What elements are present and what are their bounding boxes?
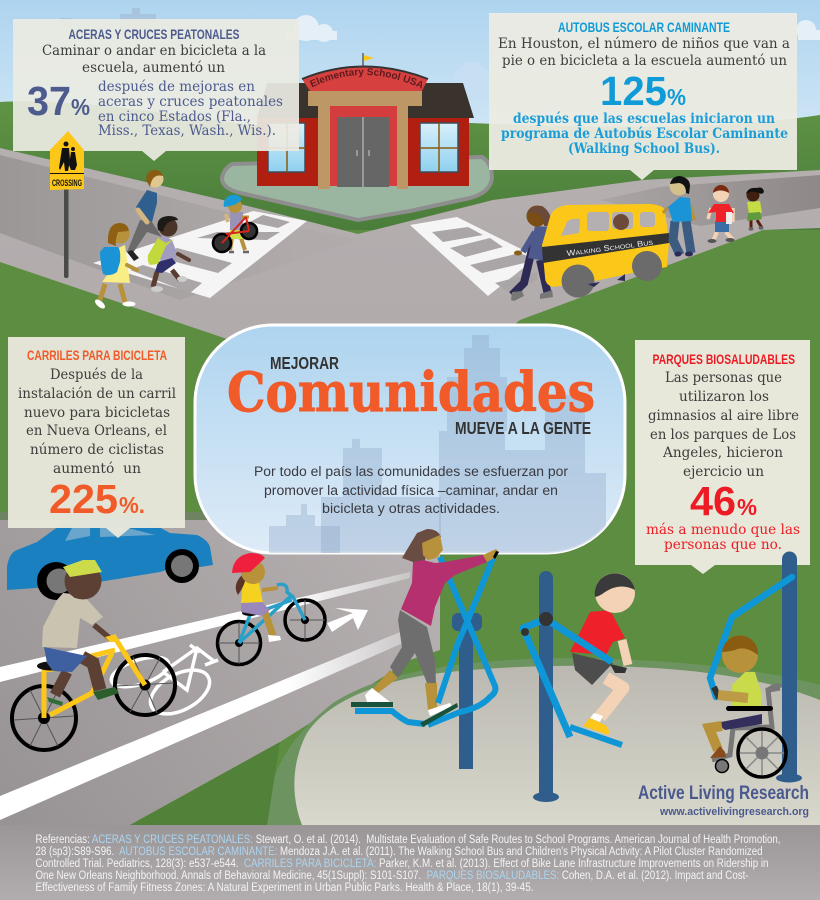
bus wheels xyxy=(562,251,662,298)
strider machine and boy xyxy=(521,571,635,802)
panel heading xyxy=(227,353,595,438)
callout: parques: ejercicio un xyxy=(683,464,764,480)
machine post xyxy=(452,613,482,769)
callout: carriles: número de ciclistas xyxy=(30,442,164,458)
panel heading: Comunidades xyxy=(227,360,595,424)
stat 125%: 125 xyxy=(600,68,667,114)
references footer xyxy=(0,825,820,900)
callout: autobus: (Walking School Bus). xyxy=(568,141,720,157)
callout: parques: Angeles, hicieron xyxy=(662,445,783,461)
rider shorts xyxy=(44,647,87,672)
callout: autobus: después que las escuelas iniciaron un xyxy=(513,111,775,127)
callout: aceras: ACERAS Y CRUCES PEATONALES xyxy=(68,26,240,42)
parked car xyxy=(7,517,213,600)
callout: carriles: instalación de un carril xyxy=(18,386,176,402)
wheels xyxy=(738,729,786,777)
callout: aceras: Caminar o andar en bicicleta a la xyxy=(42,43,266,59)
callout: autobus: pie o en bicicleta a la escuela aumentó un xyxy=(502,53,787,69)
callout: autobus: programa de Autobús Escolar Caminante xyxy=(501,126,788,142)
right crosswalk xyxy=(410,217,537,296)
callout: parques: más a menudo que las xyxy=(646,522,800,538)
rider torso xyxy=(42,593,103,648)
brick wall xyxy=(257,118,469,186)
dark grass corner xyxy=(130,742,280,825)
callout: aceras: aceras y cruces peatonales xyxy=(98,94,283,110)
callout: parques: personas que no. xyxy=(664,537,782,553)
lawn xyxy=(0,230,820,830)
callout: autobus: AUTOBUS ESCOLAR CAMINANTE xyxy=(558,19,730,35)
boy shorts xyxy=(572,653,613,685)
callout: parques xyxy=(635,340,810,574)
cyclist on yellow bike xyxy=(12,560,175,750)
logo: Active Living Research xyxy=(638,783,809,818)
bike lane symbol xyxy=(108,645,218,723)
callout: carriles: en Nueva Orleans, el xyxy=(26,423,167,439)
hand xyxy=(483,549,499,562)
panel skyline xyxy=(269,335,606,557)
callout: carriles: Después de la xyxy=(50,367,143,383)
bus name band: Walking School Bus xyxy=(566,238,654,258)
adult pedestrian xyxy=(127,170,164,261)
lower-left road xyxy=(0,520,440,825)
boy with backpack xyxy=(148,216,189,292)
crossing sign: CROSSING xyxy=(52,178,82,189)
central panel xyxy=(195,325,625,557)
callout: parques: en los parques de Los xyxy=(650,427,796,443)
callout: carriles xyxy=(8,337,185,538)
clouds and distant skyline xyxy=(60,8,820,98)
callout: aceras: después de mejoras en xyxy=(98,79,255,95)
panel text: bicicleta y otras actividades. xyxy=(322,501,500,516)
school building xyxy=(257,53,474,189)
stat 225%: %. xyxy=(119,492,145,518)
stat 46%: % xyxy=(737,494,757,520)
bike frame xyxy=(44,638,145,718)
bike lane arrow xyxy=(327,608,368,632)
shins xyxy=(372,670,437,710)
callout: parques: utilizaron los xyxy=(679,389,769,405)
callout: aceras: escuela, aumentó un xyxy=(82,60,225,76)
boy leg xyxy=(600,678,623,717)
stat 46%: 46 xyxy=(690,478,736,524)
crossing sign xyxy=(50,131,84,278)
references footer: Controlled Trial. Pediatrics, 128(3): e537-e544. CARRILES PARA BICICLETA: Parker, K.M. et al. (2013). Effect of Bike Lane Infrastructure Improvements on Ridership in xyxy=(36,858,768,870)
walking school bus xyxy=(542,204,669,298)
rider legs xyxy=(82,657,100,690)
boy head xyxy=(595,573,635,613)
wheelchair user xyxy=(709,552,802,782)
elliptical machine and woman xyxy=(351,529,499,769)
callout: aceras xyxy=(13,19,299,161)
boy shirt xyxy=(570,610,625,655)
wheels xyxy=(12,655,175,750)
panel text: Por todo el país las comunidades se esfuerzan por xyxy=(254,464,569,479)
pants xyxy=(390,610,436,683)
stat 225%: 225 xyxy=(49,476,118,522)
bus windows xyxy=(561,212,655,236)
sky background xyxy=(0,0,820,150)
stat 37%: 37 xyxy=(27,78,71,124)
references footer: Effectiveness of Family Fitness Zones: A Natural Experiment in Urban Public Parks. Health & Place, 18(1), 39-45. xyxy=(36,882,534,894)
callout: carriles: CARRILES PARA BICICLETA xyxy=(27,347,167,363)
stat 46% xyxy=(690,478,757,524)
bike lane lines xyxy=(0,572,410,820)
roadside shade xyxy=(0,512,230,520)
left window xyxy=(268,123,305,172)
callout: autobus xyxy=(489,13,797,180)
panel text: promover la actividad física –caminar, andar en xyxy=(264,483,558,498)
girl cyclist xyxy=(218,553,325,664)
left crosswalk xyxy=(93,211,307,298)
panel heading: MEJORAR xyxy=(270,353,339,373)
stat 37%: % xyxy=(71,94,90,120)
street dark lane left xyxy=(0,155,358,300)
callout: aceras: en cinco Estados (Fla., xyxy=(98,109,251,125)
right window xyxy=(420,123,458,172)
stat 125%: % xyxy=(667,84,686,110)
jacket xyxy=(401,555,487,626)
references footer: One New Orleans Neighborhood. Annals of Behavioral Medicine, 45(1Suppl): S101-S107. PARQUES BIOSALUDABLES: Cohen, D.A. et al. (2012). Impact and Cost- xyxy=(36,870,749,882)
woman in blue xyxy=(663,176,694,256)
small girl xyxy=(746,188,764,231)
panel heading: MUEVE A LA GENTE xyxy=(455,418,591,438)
girl with backpack xyxy=(93,223,137,310)
callout: carriles: nuevo para bicicletas xyxy=(24,405,170,421)
callout: carriles: aumentó un xyxy=(53,461,141,477)
entrance xyxy=(308,91,422,189)
logo: Active Living Research: www.activelivingresearch.org xyxy=(659,806,809,818)
wheelchair frame xyxy=(712,688,780,760)
pedestrians icon xyxy=(59,142,77,171)
callout: parques: gimnasios al aire libre xyxy=(648,408,799,424)
shoes xyxy=(365,688,452,716)
upper street xyxy=(0,148,820,360)
school sign: Elementary School USA xyxy=(310,68,422,89)
panel text xyxy=(254,464,569,516)
park ring xyxy=(267,658,820,825)
flag xyxy=(363,53,374,67)
rider helmet xyxy=(63,560,102,577)
hair xyxy=(402,529,441,565)
school yard xyxy=(222,157,492,220)
street dark lane right xyxy=(600,175,820,226)
park path xyxy=(294,666,820,825)
callout: aceras: Miss., Texas, Wash., Wis.). xyxy=(98,123,276,139)
face xyxy=(422,535,443,560)
child with bicycle xyxy=(213,195,257,252)
callout: parques: Las personas que xyxy=(665,370,782,386)
callout: autobus: En Houston, el número de niños que van a xyxy=(498,36,790,52)
bus body xyxy=(542,204,669,287)
child legs and torso xyxy=(716,714,762,730)
adult leading walking group xyxy=(511,206,555,301)
roof xyxy=(257,83,474,118)
hills xyxy=(0,101,820,300)
boy in red xyxy=(708,185,734,243)
machine arms xyxy=(355,557,495,725)
